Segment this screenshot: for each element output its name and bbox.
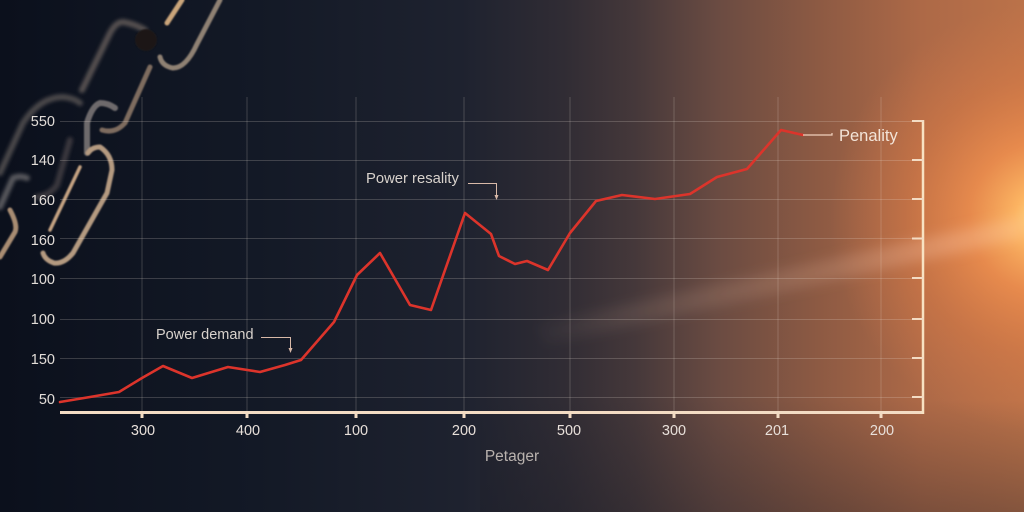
x-axis title: Petager — [485, 448, 539, 465]
callout: power demand — [156, 327, 292, 353]
callout: power resality: Power resality — [366, 171, 460, 187]
data line — [60, 130, 803, 402]
callout: power demand: Power demand — [156, 327, 254, 343]
y-axis labels: 50 — [39, 392, 55, 408]
callout: penality: Penality — [839, 127, 898, 145]
y-axis labels — [31, 114, 55, 408]
x-axis labels — [131, 423, 894, 439]
x-axis labels: 200 — [870, 423, 894, 439]
x-axis labels: 300 — [131, 423, 155, 439]
x-axis labels: 500 — [557, 423, 581, 439]
x-axis labels: 201 — [765, 423, 789, 439]
grid lines — [60, 97, 923, 413]
axes — [60, 120, 924, 418]
y-axis labels: 100 — [31, 312, 55, 328]
callout: penality — [803, 127, 898, 145]
callout: power resality — [366, 171, 498, 200]
x-axis labels: 300 — [662, 423, 686, 439]
y-axis labels: 100 — [31, 272, 55, 288]
y-axis labels: 160 — [31, 193, 55, 209]
y-axis labels: 160 — [31, 233, 55, 249]
x-axis labels: 100 — [344, 423, 368, 439]
y-axis labels: 150 — [31, 352, 55, 368]
x-axis labels: 400 — [236, 423, 260, 439]
y-axis labels: 550 — [31, 114, 55, 130]
y-axis labels: 140 — [31, 153, 55, 169]
light streak — [535, 216, 1024, 345]
x-axis labels: 200 — [452, 423, 476, 439]
icon: chain — [0, 0, 220, 263]
